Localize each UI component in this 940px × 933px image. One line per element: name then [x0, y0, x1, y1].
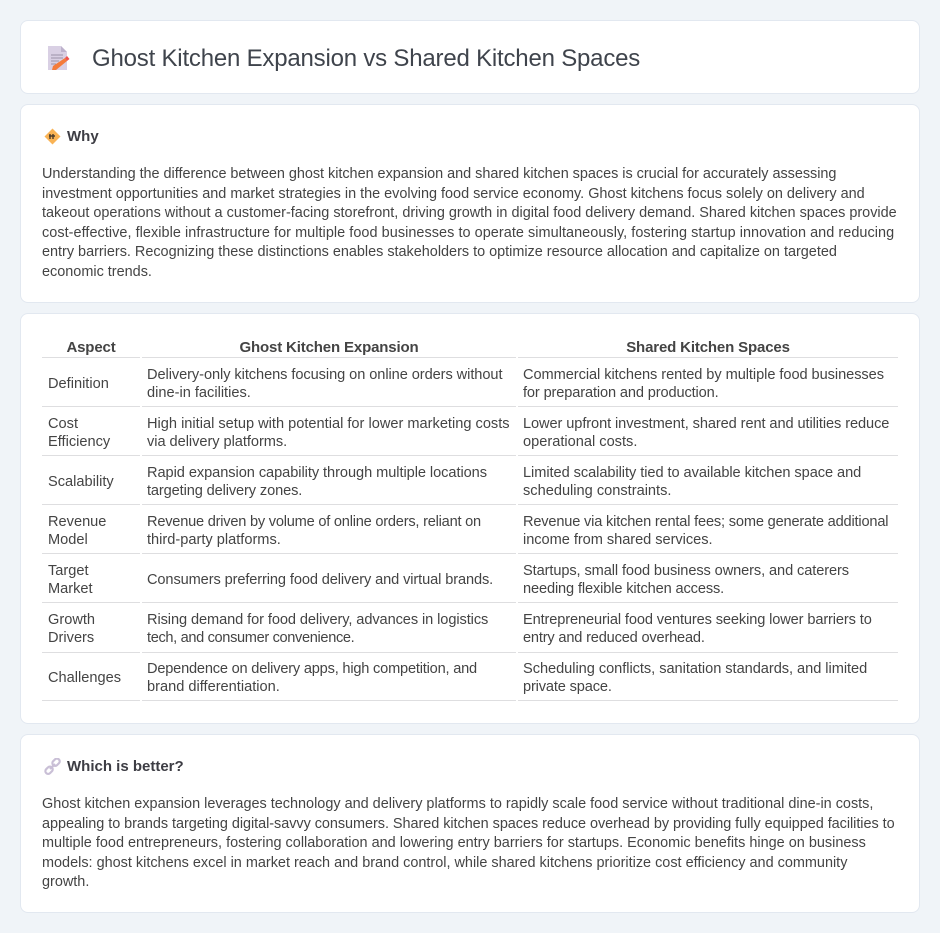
row: target market [48, 563, 849, 597]
icon: chain link [44, 758, 61, 775]
row: revenue model: third-party platforms. [147, 532, 281, 548]
row: cost efficiency: Cost [48, 416, 78, 432]
row: cost efficiency: High initial setup with potential for lower marketing costs [147, 416, 510, 432]
row: challenges: private space. [523, 679, 612, 695]
text block: why paragraph: economic trends. [42, 264, 152, 280]
text block: which is better paragraph: multiple food entrepreneurs, fostering collaboration and lowering entry barriers for startups. Economic benefits hinge on business [42, 835, 866, 851]
text block: why paragraph: Understanding the difference between ghost kitchen expansion and shared kitchen spaces is crucial for accurately assessing [42, 166, 836, 182]
text block: which is better paragraph: models: ghost kitchens excel in market reach and brand control, while shared kitchens prioritize cost efficiency and community [42, 855, 847, 871]
row: revenue model: Revenue via kitchen rental fees; some generate additional [523, 514, 888, 530]
row: revenue model: Revenue [48, 514, 106, 530]
row: scalability: targeting delivery zones. [147, 483, 302, 499]
row: growth drivers [48, 612, 872, 646]
panel: title card [20, 20, 920, 94]
text block: why paragraph: investment opportunities and market strategies in the evolving food service economy. Ghost kitchens focus solely on delivery and [42, 186, 865, 202]
row: definition: for preparation and production. [523, 385, 719, 401]
row: revenue model: Revenue driven by volume of online orders, reliant on [147, 514, 481, 530]
row: definition: Commercial kitchens rented by multiple food businesses [523, 367, 884, 383]
panel: which is better card [20, 734, 920, 913]
text block: which is better paragraph: appealing to brands targeting digital-savvy consumers. Shared kitchen spaces reduce overhead by providing fully equipped facilities to [42, 816, 895, 832]
row: growth drivers: entry and reduced overhead. [523, 630, 705, 646]
row: challenges: brand differentiation. [147, 679, 280, 695]
row: growth drivers: tech, and consumer convenience. [147, 630, 354, 646]
row: cost efficiency: Efficiency [48, 434, 110, 450]
row: scalability: Rapid expansion capability through multiple locations [147, 465, 487, 481]
text block: which is better paragraph [42, 796, 895, 890]
icon: document with pencil [48, 46, 70, 70]
row: growth drivers: Growth [48, 612, 95, 628]
row: definition: Delivery-only kitchens focusing on online orders without [147, 367, 502, 383]
row: challenges: Scheduling conflicts, sanitation standards, and limited [523, 661, 867, 677]
heading: which is better: Which is better? [67, 758, 184, 775]
row: target market: Market [48, 581, 93, 597]
row: cost efficiency [48, 416, 889, 450]
row: challenges: Dependence on delivery apps, high competition, and [147, 661, 477, 677]
row: scalability: scheduling constraints. [523, 483, 671, 499]
panel: why card [20, 104, 920, 303]
column header: ghost kitchen expansion: Ghost Kitchen Expansion [239, 339, 419, 356]
row: revenue model: income from shared services. [523, 532, 712, 548]
row: definition [48, 367, 884, 401]
row: target market: needing flexible kitchen access. [523, 581, 724, 597]
text block: why paragraph: cost-effective, flexible infrastructure for multiple food businesses to operate simultaneously, fostering startup innovation and reducing [42, 225, 894, 241]
heading: why: Why [67, 128, 99, 145]
icon: diamond warning sign [44, 128, 60, 144]
panel: comparison table card [20, 313, 920, 724]
text block: why paragraph [42, 166, 897, 280]
row: growth drivers: Drivers [48, 630, 94, 646]
row: challenges: Challenges [48, 670, 121, 686]
column header: shared kitchen spaces: Shared Kitchen Spaces [626, 339, 790, 356]
row: growth drivers: Rising demand for food delivery, advances in logistics [147, 612, 488, 628]
row: cost efficiency: via delivery platforms. [147, 434, 287, 450]
row: scalability: Limited scalability tied to available kitchen space and [523, 465, 861, 481]
row: revenue model: Model [48, 532, 88, 548]
row: growth drivers: Entrepreneurial food ventures seeking lower barriers to [523, 612, 872, 628]
row: revenue model [48, 514, 888, 548]
column header: aspect: Aspect [66, 339, 116, 356]
row: target market: Startups, small food business owners, and caterers [523, 563, 849, 579]
row: target market: Target [48, 563, 89, 579]
text block: why paragraph: takeout operations without a customer-facing storefront, driving growth in digital food delivery demand. Shared kitchen spaces provide [42, 205, 897, 221]
row: target market: Consumers preferring food delivery and virtual brands. [147, 572, 493, 588]
text block: which is better paragraph: Ghost kitchen expansion leverages technology and delivery platforms to rapidly scale food service without traditional dine-in costs, [42, 796, 873, 812]
row: challenges [48, 661, 867, 695]
row: scalability: Scalability [48, 474, 114, 490]
row: definition: dine-in facilities. [147, 385, 251, 401]
row: cost efficiency: Lower upfront investment, shared rent and utilities reduce [523, 416, 889, 432]
title: Ghost Kitchen Expansion vs Shared Kitchen Spaces [92, 45, 640, 72]
text block: why paragraph: entry barriers. Recognizing these distinctions enables stakeholders to optimize resource allocation and capitalize on targeted [42, 244, 837, 260]
row: definition: Definition [48, 376, 109, 392]
text block: which is better paragraph: growth. [42, 874, 89, 890]
row: scalability [48, 465, 861, 499]
row: cost efficiency: operational costs. [523, 434, 637, 450]
